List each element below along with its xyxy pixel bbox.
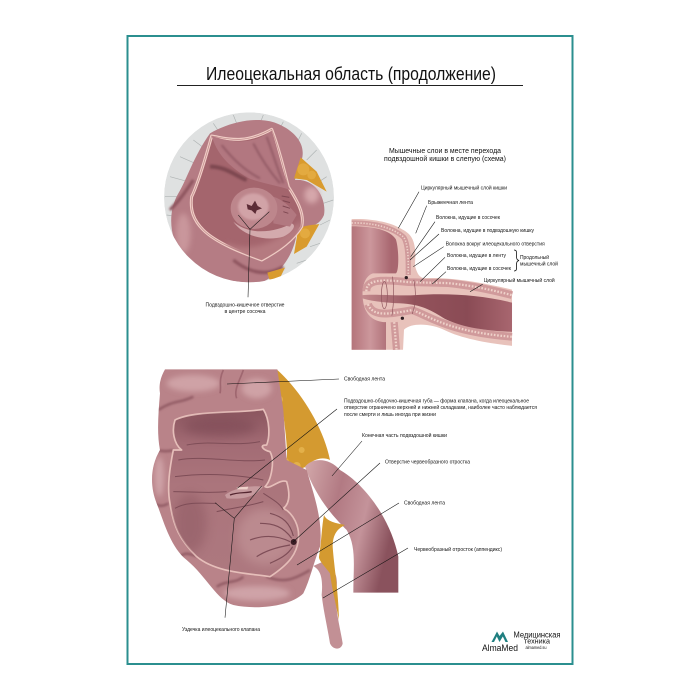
fat deposits bbox=[267, 157, 327, 279]
bracket: longitudinal muscle layer bbox=[514, 250, 519, 271]
muscle layer bands bbox=[352, 223, 512, 350]
labels: muscle layers: Волокна, идущие в ленту bbox=[447, 253, 506, 259]
circular tissue background bbox=[164, 112, 334, 282]
labels: opened cecum: Уздечка илеоцекального клапана bbox=[182, 627, 260, 633]
labels: opened cecum: отверстие ограничено верхней и нижней складками, наиболее часто наблюдается bbox=[344, 404, 537, 411]
logo: AlmaMed: техника bbox=[524, 638, 550, 646]
labels: muscle layers: Циркулярный мышечный слой кишки bbox=[421, 184, 507, 192]
lower lip fold bbox=[233, 222, 294, 239]
interior shading bbox=[237, 508, 293, 565]
labels: muscle layers: Брыжеечная лента bbox=[428, 200, 473, 206]
muscle fibres bbox=[381, 277, 415, 316]
label: circular view bbox=[206, 302, 285, 315]
opened cut edge and interior bbox=[191, 129, 302, 267]
illustration: opened cecum bbox=[152, 369, 398, 649]
logo: AlmaMed: AlmaMed bbox=[482, 643, 518, 653]
cecum exterior bbox=[152, 369, 321, 607]
labels: muscle layers: Циркулярный мышечный слой bbox=[484, 277, 555, 284]
fat lobules bbox=[276, 396, 305, 473]
papilla furrows bbox=[282, 196, 290, 213]
heading: muscle layer schematic bbox=[384, 148, 506, 163]
labels: opened cecum: Свободная лента bbox=[404, 500, 445, 506]
heading: muscle layer schematic: подвздошной кишки в слепую (схема) bbox=[384, 155, 506, 163]
cecum lumen bbox=[352, 226, 398, 350]
labels: muscle layers bbox=[421, 184, 558, 284]
appendiceal orifice bbox=[291, 539, 297, 545]
page frame bbox=[128, 36, 572, 664]
schematic wall bbox=[352, 219, 512, 350]
labels: opened cecum: Отверстие червеобразного отростка bbox=[385, 460, 470, 466]
mesoappendix fat bbox=[319, 515, 345, 620]
title: Илеоцекальная область (продолжение) bbox=[206, 63, 496, 84]
logo: AlmaMed bbox=[482, 630, 560, 653]
labels: muscle layers: Волокна, идущие в сосочек bbox=[436, 215, 501, 221]
cross-section vessels bbox=[401, 276, 408, 320]
leader lines bbox=[215, 192, 483, 618]
labels: opened cecum: после смерти и лишь иногда при жизни bbox=[344, 412, 436, 418]
labels: muscle layers: мышечный слой bbox=[520, 260, 558, 268]
bowel exterior bbox=[171, 120, 324, 282]
appendix bbox=[313, 560, 343, 649]
labels: opened cecum: Червеобразный отросток (аппендикс) bbox=[414, 546, 502, 553]
logo: AlmaMed: Медицинская bbox=[514, 630, 560, 640]
logo icon bbox=[492, 632, 508, 642]
ileal papilla bbox=[231, 188, 277, 229]
labels: muscle layers: Волокна, идущие в сосочек bbox=[447, 266, 512, 272]
ileocecal valve bbox=[225, 486, 263, 499]
label: circular view: в центре сосочка bbox=[224, 309, 266, 315]
pericolic fat bbox=[277, 369, 330, 472]
labels: muscle layers: Продольный bbox=[520, 254, 549, 261]
mucosal folds bbox=[173, 442, 265, 508]
labels: opened cecum: Свободная лента bbox=[344, 376, 385, 382]
labels: muscle layers: Волокна, идущие в подвздошную кишку bbox=[441, 228, 534, 234]
opened cecum interior bbox=[169, 409, 299, 577]
illustration: schematic of muscle layers bbox=[352, 219, 512, 350]
terminal ileum bbox=[305, 460, 398, 593]
labels: opened cecum bbox=[182, 376, 537, 633]
ileum lumen bbox=[362, 294, 512, 332]
labels: opened cecum: Конечная часть подвздошной кишки bbox=[362, 432, 447, 439]
heading: muscle layer schematic: Мышечные слои в месте перехода bbox=[389, 148, 501, 155]
labels: muscle layers: Волокна вокруг илеоцекального отверстия bbox=[446, 242, 545, 248]
logo: AlmaMed: almamed.su bbox=[526, 645, 547, 650]
illustration: circular view of ileal orifice bbox=[164, 112, 334, 282]
label: circular view: Подвздошно-кишечное отверстие bbox=[206, 302, 285, 308]
labels: opened cecum: Подвздошно-ободочно-кишечная губа — форма клапана, когда илеоцекальное bbox=[344, 398, 529, 404]
upper fold flap bbox=[212, 131, 290, 190]
